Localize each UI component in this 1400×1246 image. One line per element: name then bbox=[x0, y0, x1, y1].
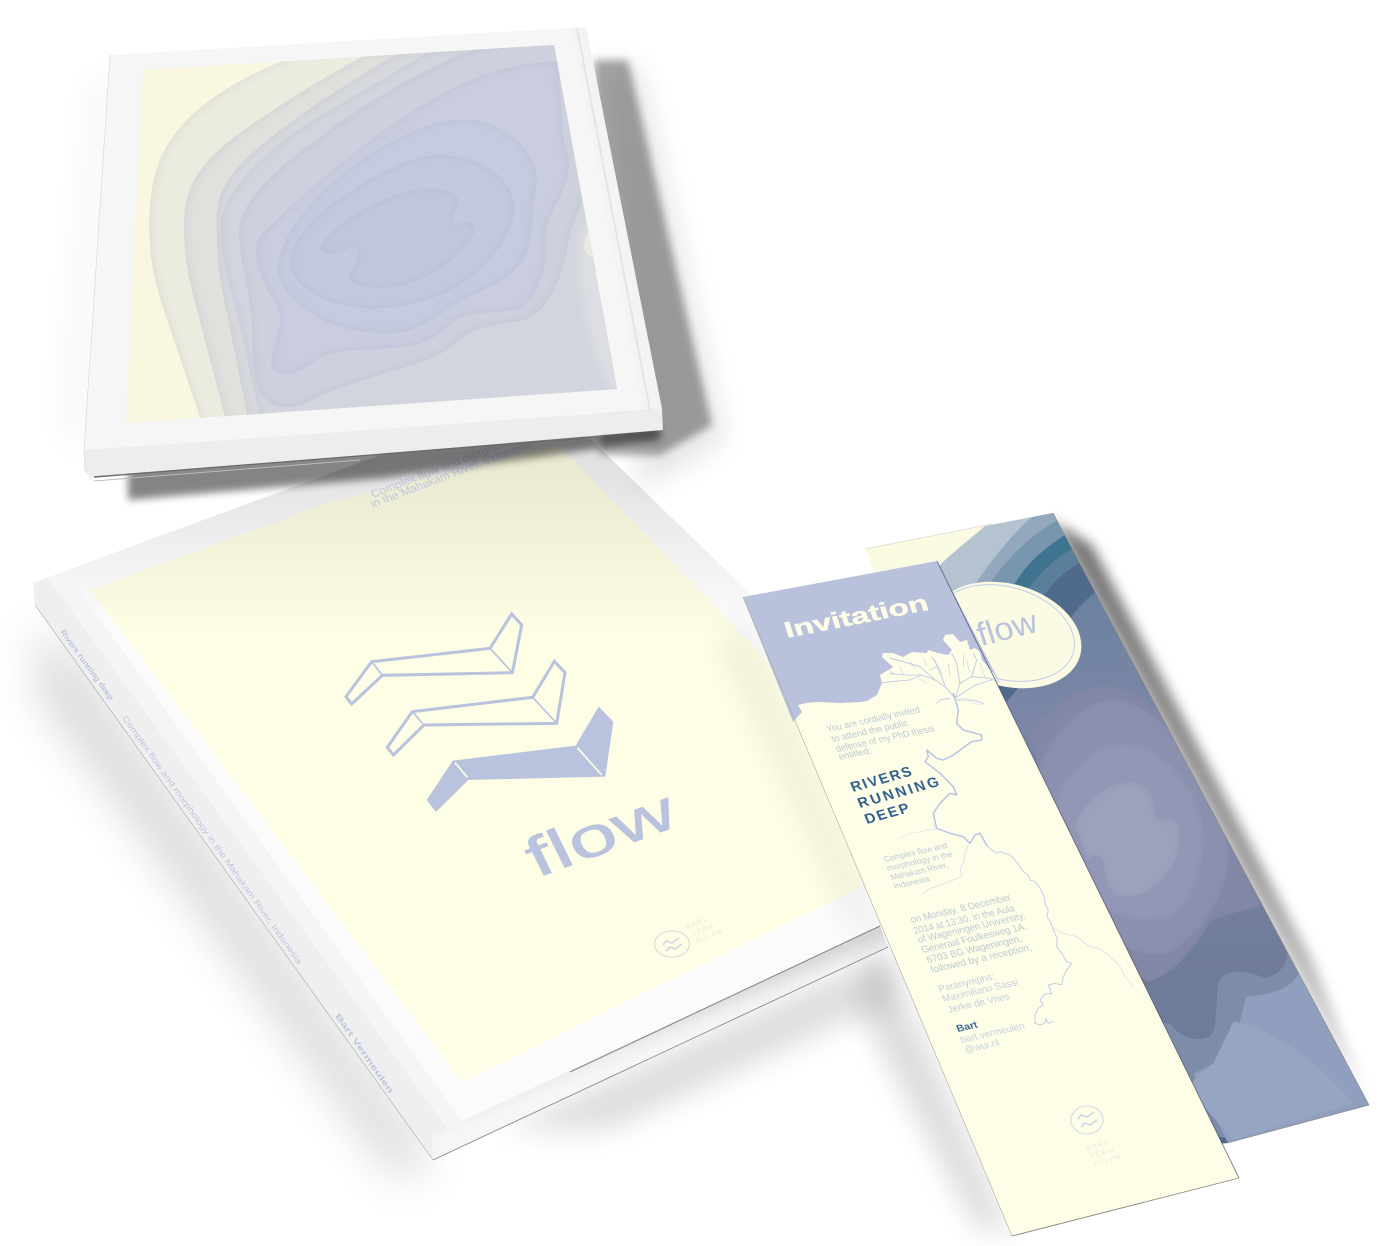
band six bbox=[998, 563, 1228, 1144]
invitation greeting bbox=[825, 705, 937, 763]
invitation greeting: entitled: bbox=[837, 746, 873, 763]
top book cover bbox=[84, 27, 662, 450]
date and venue: on Monday, 8 December bbox=[909, 893, 1013, 926]
book spine face bbox=[33, 578, 447, 1160]
under layer bbox=[1164, 952, 1298, 1138]
shadow: front bookmark on book bbox=[720, 610, 885, 935]
author mark on bookmark bbox=[1071, 1106, 1123, 1168]
invitation greeting: You are cordially invited bbox=[825, 705, 922, 735]
cream base bbox=[865, 526, 985, 572]
subtitle line one: Complex flow and morphology bbox=[369, 432, 524, 501]
ring three bbox=[1055, 743, 1204, 921]
top book underside pages bbox=[84, 409, 663, 478]
bookmark lavender header bbox=[743, 561, 1000, 722]
spine text: short title: Rivers running deep bbox=[58, 628, 116, 702]
dark band layer bbox=[1006, 593, 1287, 1039]
medallion wordmark: flow bbox=[972, 604, 1043, 653]
chevron one outline bbox=[346, 614, 522, 704]
author mark text bbox=[685, 917, 724, 945]
contour layer seven bbox=[278, 119, 538, 333]
book cream panel bbox=[90, 445, 900, 1082]
book spine title bbox=[58, 628, 395, 1095]
mark text: BART bbox=[1086, 1140, 1110, 1152]
back bookmark bbox=[865, 512, 1370, 1144]
contour layer five bbox=[239, 52, 582, 407]
contact: bart.vermeulen bbox=[959, 1021, 1027, 1046]
contour centre bbox=[321, 188, 475, 288]
contact: Bart bbox=[955, 1020, 980, 1035]
chevron three solid bbox=[427, 707, 613, 812]
spine text: author: Bart Vermeulen bbox=[333, 1012, 395, 1095]
lower light layer bbox=[1192, 1022, 1240, 1122]
top book contour artwork bbox=[126, 45, 617, 423]
thesis subtitle: Complex flow and bbox=[882, 840, 949, 864]
contour layer six bbox=[256, 62, 569, 374]
thesis subtitle: Indonesia bbox=[892, 874, 931, 891]
band three bbox=[991, 520, 1226, 1144]
shadow: back bookmark bbox=[1053, 520, 1369, 1105]
right shadow bbox=[594, 60, 712, 455]
date and venue: 6703 BG Wageningen, bbox=[925, 934, 1024, 966]
paranymphs: Paranymphs: bbox=[937, 972, 997, 995]
ring two bbox=[1039, 764, 1056, 801]
paranymphs bbox=[937, 972, 1020, 1016]
book page block thickness bbox=[432, 926, 888, 1160]
shadow: big book on ground bbox=[38, 620, 430, 1180]
spine text: subtitle: Complex flow and morphology in the Mahakam River, Indonesia bbox=[120, 714, 304, 966]
thesis title: RIVERS bbox=[848, 764, 915, 796]
shadow: front bookmark on ground bbox=[860, 945, 1012, 1236]
book edge dark lines bbox=[570, 926, 880, 1072]
mark text: EULEN bbox=[1093, 1154, 1123, 1168]
logo wordmark: flow: flow bbox=[515, 779, 687, 889]
author mark text: VERM bbox=[690, 923, 715, 938]
lower blue layer bbox=[1194, 974, 1368, 1142]
ring centre bbox=[1075, 782, 1180, 897]
mark text: VERM bbox=[1090, 1147, 1116, 1160]
left tributary bbox=[923, 845, 968, 893]
contour right edge layer bbox=[583, 226, 616, 385]
author mark text: EULEN bbox=[695, 929, 724, 945]
ring one bbox=[1030, 686, 1260, 982]
right tributary bbox=[1053, 928, 1133, 987]
mark text bbox=[1086, 1140, 1123, 1168]
left soft halo bbox=[60, 70, 110, 460]
date and venue bbox=[909, 893, 1034, 976]
contour layer four bbox=[221, 50, 460, 414]
contour right blob bbox=[584, 233, 592, 256]
thesis subtitle: morphology in the bbox=[885, 849, 954, 873]
front bookmark bbox=[743, 561, 1239, 1236]
river line bbox=[900, 693, 1133, 1025]
mark circle bbox=[1071, 1106, 1103, 1134]
back bookmark contours bbox=[865, 513, 1368, 1144]
logo: three chevrons bbox=[346, 614, 613, 812]
bookmark cream card bbox=[743, 561, 1239, 1236]
invitation greeting: to attend the public bbox=[830, 718, 910, 745]
book hinge band bbox=[48, 572, 462, 1128]
cream base bbox=[126, 62, 281, 423]
contact bbox=[955, 1020, 1027, 1056]
subtitle line two: in the Mahakam River, Indonesia bbox=[369, 438, 535, 511]
band four teal bbox=[1014, 536, 1226, 1144]
book cover board bbox=[33, 395, 1020, 1135]
book cover subtitle bbox=[369, 432, 535, 511]
small top tributaries bbox=[953, 698, 983, 705]
soft right halo bbox=[600, 60, 725, 490]
thesis subtitle bbox=[882, 840, 954, 891]
contour layer three bbox=[216, 52, 426, 414]
shadow: book lower edge on ground bbox=[500, 950, 892, 1130]
paranymphs: Maximiliano Sassi bbox=[941, 977, 1020, 1005]
date and venue: followed by a reception, bbox=[929, 942, 1034, 976]
bookmark edges bbox=[937, 561, 1239, 1178]
date and venue: of Wageningen University, bbox=[916, 911, 1027, 946]
medallion disc bbox=[920, 565, 1094, 705]
thesis subtitle: Mahakam River, bbox=[889, 860, 949, 882]
back bookmark edge bbox=[1053, 513, 1369, 1143]
contact: @wur.nl bbox=[963, 1038, 1001, 1056]
contour layer eight bbox=[496, 174, 507, 186]
lower river bbox=[987, 845, 1072, 1025]
contour layer one bbox=[150, 57, 362, 418]
upper left tributary bbox=[900, 823, 935, 838]
date and venue: Generaal Foulkesweg 1A, bbox=[920, 922, 1028, 956]
band one bbox=[940, 513, 1052, 592]
chevron two outline bbox=[387, 661, 565, 755]
medallion ring bbox=[924, 569, 1086, 697]
thesis title: DEEP bbox=[862, 801, 912, 828]
thesis book: cover bbox=[33, 395, 1020, 1160]
delta channels bbox=[881, 653, 998, 703]
upper river bbox=[925, 693, 987, 845]
band five bbox=[1029, 549, 1226, 1144]
invitation greeting: defense of my PhD thesis bbox=[834, 723, 937, 755]
contour layer two bbox=[184, 54, 396, 416]
date and venue: 2014 at 13:30, in the Aula bbox=[912, 903, 1017, 937]
paranymphs: Jerke de Vries bbox=[946, 991, 1012, 1016]
author mark circle bbox=[654, 931, 690, 957]
author mark text: BART bbox=[685, 917, 709, 931]
thesis title bbox=[848, 764, 942, 828]
top book spine strip bbox=[572, 27, 662, 410]
band two bbox=[976, 513, 1056, 583]
lower shadow bbox=[128, 425, 660, 500]
shadow: top book on ground and lower book bbox=[60, 60, 725, 500]
small author mark on cover bbox=[654, 917, 724, 957]
heading: Invitation: Invitation bbox=[781, 590, 932, 643]
top book bbox=[84, 20, 692, 487]
thesis title: RUNNING bbox=[855, 775, 942, 812]
